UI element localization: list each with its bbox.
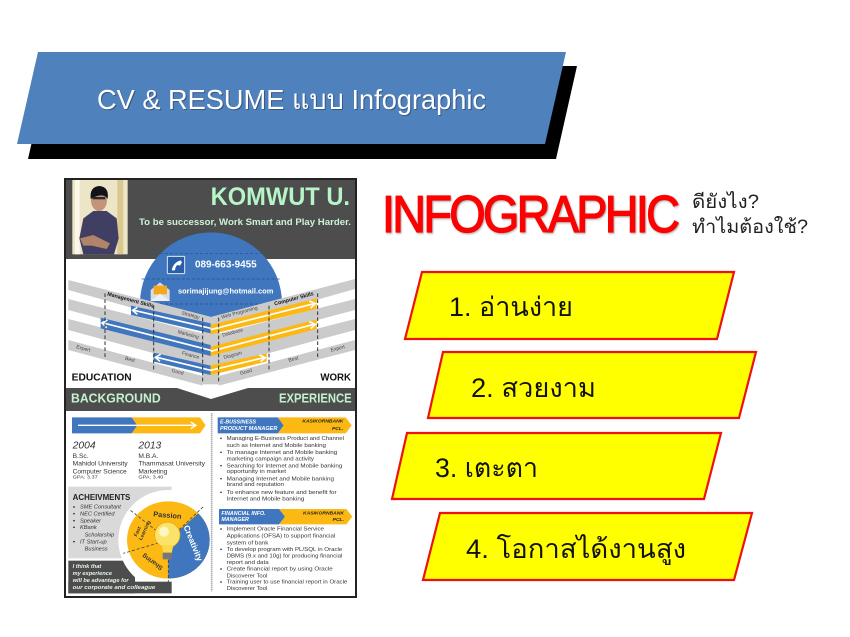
work heading: WORK <box>320 373 352 384</box>
banner panel <box>17 52 566 144</box>
skills wheel: Fast <box>133 526 143 538</box>
job duties: financial info: Discoverer Tool <box>227 573 267 579</box>
skill labels: Computer Skills <box>274 291 314 307</box>
achievements panel: SME Consultant <box>80 505 121 511</box>
education 2013: Marketing <box>138 469 167 475</box>
job header: financial info: PCL. <box>333 517 344 523</box>
education 2004: Computer Science <box>73 469 127 475</box>
job duties: financial info: DBMS (9.x and 10g) for producing financial <box>227 554 342 560</box>
skill labels: Strategy <box>181 310 201 321</box>
statement text: will be advantage for <box>73 578 129 584</box>
education 2004 <box>72 440 128 480</box>
education 2013: GPA: 3.40 <box>138 475 164 480</box>
education 2004: B.Sc. <box>73 453 89 460</box>
job duties: e-business: Searching for Internet and Mobile banking <box>227 463 342 469</box>
skills wheel: Learning <box>138 520 152 541</box>
statement box lower strip <box>68 582 172 593</box>
job duties: financial info: Applications (OFSA) to support financial <box>227 534 335 540</box>
orange skill bars <box>211 298 317 375</box>
INFOGRAPHIC heading: INFOGRAPHIC <box>382 186 678 244</box>
upper CV section <box>68 180 355 386</box>
job duties: financial info: Implement Oracle Financial Service <box>227 527 324 533</box>
reason 1: 1. อ่านง่าย <box>449 292 573 322</box>
education 2004: GPA: 3.37 <box>73 475 98 480</box>
reason 3: 3. เตะตา <box>435 453 538 483</box>
icon: phone <box>167 256 185 274</box>
job header: e-business: PCL. <box>332 426 343 432</box>
job header: e-business: KASIKORNBANK <box>302 418 344 424</box>
experience heading: EXPERIENCE <box>279 391 352 405</box>
dashed column guides <box>105 293 318 383</box>
achievements panel: ACHEIVMENTS <box>73 493 131 502</box>
achievements panel: KBank <box>80 525 98 531</box>
job header: e-business: PRODUCT MANAGER <box>220 426 277 432</box>
name: KOMWUT U. <box>211 184 350 211</box>
skill labels: Diagram <box>223 350 243 361</box>
statement text: our corporate and colleague <box>73 585 155 591</box>
job duties: e-business: To manage Internet and Mobile banking <box>227 450 337 456</box>
job duties: financial info <box>220 527 347 592</box>
reason 4 <box>423 513 752 580</box>
job duties: e-business: Managing Internet and Mobile banking <box>227 476 334 482</box>
education 2004: 2004 <box>72 440 96 451</box>
dotted divider <box>209 413 214 592</box>
tagline: To be successor, Work Smart and Play Harder. <box>139 217 351 227</box>
skill labels: Management Skills <box>107 292 154 310</box>
job duties: financial info: Create financial report by using Oracle <box>227 567 333 573</box>
job header: financial info: MANAGER <box>221 517 249 523</box>
job duties: financial info: To develop program with PL/SQL in Oracle <box>227 547 342 553</box>
background and experience banner <box>65 388 355 411</box>
job duties: e-business <box>220 436 344 502</box>
timeline arrow <box>72 417 206 433</box>
subheading line 1: ดียังไง? <box>692 191 759 213</box>
job header: financial info: FINANCIAL INFO. <box>221 511 266 517</box>
reason 2 <box>428 352 756 418</box>
job duties: e-business: opportunity in market <box>227 469 286 475</box>
education 2013 <box>137 440 205 480</box>
subheading line 2: ทำไมต้องใช้? <box>692 216 808 238</box>
job duties: e-business: Internet and Mobile banking <box>227 496 304 502</box>
blue skill bars <box>101 306 211 375</box>
education 2004: Mahidol University <box>73 461 128 467</box>
statement text: I think that <box>73 564 102 570</box>
education 2013: M.B.A. <box>138 453 158 460</box>
V skill bands <box>68 279 355 386</box>
lower-right CV section <box>212 391 352 592</box>
reason 1 <box>405 272 734 339</box>
achievements panel: IT Start-up <box>80 539 107 545</box>
job header: financial info: KASIKORNBANK <box>303 510 344 516</box>
achievements panel: Speaker <box>80 518 102 524</box>
skill labels: Expert <box>330 344 346 354</box>
job duties: e-business: such as Internet and Mobile banking <box>227 443 326 449</box>
statement text <box>73 564 155 591</box>
background heading: BACKGROUND <box>71 391 161 405</box>
skill labels: Good <box>171 368 184 377</box>
job duties: e-business: brand and reputation <box>227 482 284 488</box>
education heading: EDUCATION <box>72 373 132 384</box>
skills wheel: Sharing <box>141 552 164 571</box>
title banner <box>17 52 577 159</box>
skills wheel <box>118 490 218 590</box>
skill labels: Good <box>240 368 253 377</box>
skill labels: Best <box>124 356 136 364</box>
reason 3 <box>392 433 721 499</box>
CV background <box>65 179 356 597</box>
skills wheel: Passion <box>153 509 182 521</box>
reason 2: 2. สวยงาม <box>471 373 596 403</box>
portrait photo <box>72 180 128 254</box>
reason 4: 4. โอกาสได้งานสูง <box>466 534 686 565</box>
skill labels: Best <box>288 355 300 364</box>
job duties: e-business: marketing campaign and activity <box>227 456 314 462</box>
skill labels: Finance <box>181 350 200 361</box>
skill labels: Web Programing <box>221 305 259 321</box>
job duties: e-business: To enhance new feature and benefit for <box>227 490 337 496</box>
skill labels: Marketing <box>177 329 200 341</box>
statement text: my experience <box>73 571 112 577</box>
job duties: financial info: system of bank <box>227 540 268 546</box>
achievements panel: Business <box>85 547 108 553</box>
achievements panel: Scholarship <box>85 533 114 539</box>
skill labels <box>75 291 346 377</box>
job header: e-business: E-BUSSINESS <box>220 420 257 426</box>
job duties: e-business: Managing E-Business Product and Channel <box>227 436 344 442</box>
job header: financial info <box>219 509 352 524</box>
CV frame <box>65 179 356 597</box>
icon: envelope <box>151 282 170 301</box>
job header: e-business <box>218 417 352 433</box>
contact circle <box>140 232 282 317</box>
achievements panel: NEC Certified <box>80 511 115 517</box>
email address: sorimajijung@hotmail.com <box>178 286 274 295</box>
job duties: financial info: report and data <box>227 560 269 566</box>
skill labels: Database <box>222 327 244 339</box>
job duties: financial info: Discoverer Tool <box>227 586 267 592</box>
education 2013: Thammasat University <box>138 461 205 467</box>
education 2013: 2013 <box>137 440 162 451</box>
achievements panel <box>68 487 172 558</box>
lower-left CV section <box>68 391 218 593</box>
panel: CV infographic <box>65 179 356 597</box>
phone number: 089-663-9455 <box>195 259 257 270</box>
statement box <box>68 561 135 593</box>
job duties: financial info: Training user to use financial report in Oracle <box>227 580 347 586</box>
skills wheel: Creativity <box>182 524 205 563</box>
banner title: CV & RESUME แบบ Infographic <box>97 84 486 115</box>
CV header band <box>65 179 356 259</box>
banner shadow <box>28 66 577 159</box>
skill labels: Expert <box>75 344 91 354</box>
